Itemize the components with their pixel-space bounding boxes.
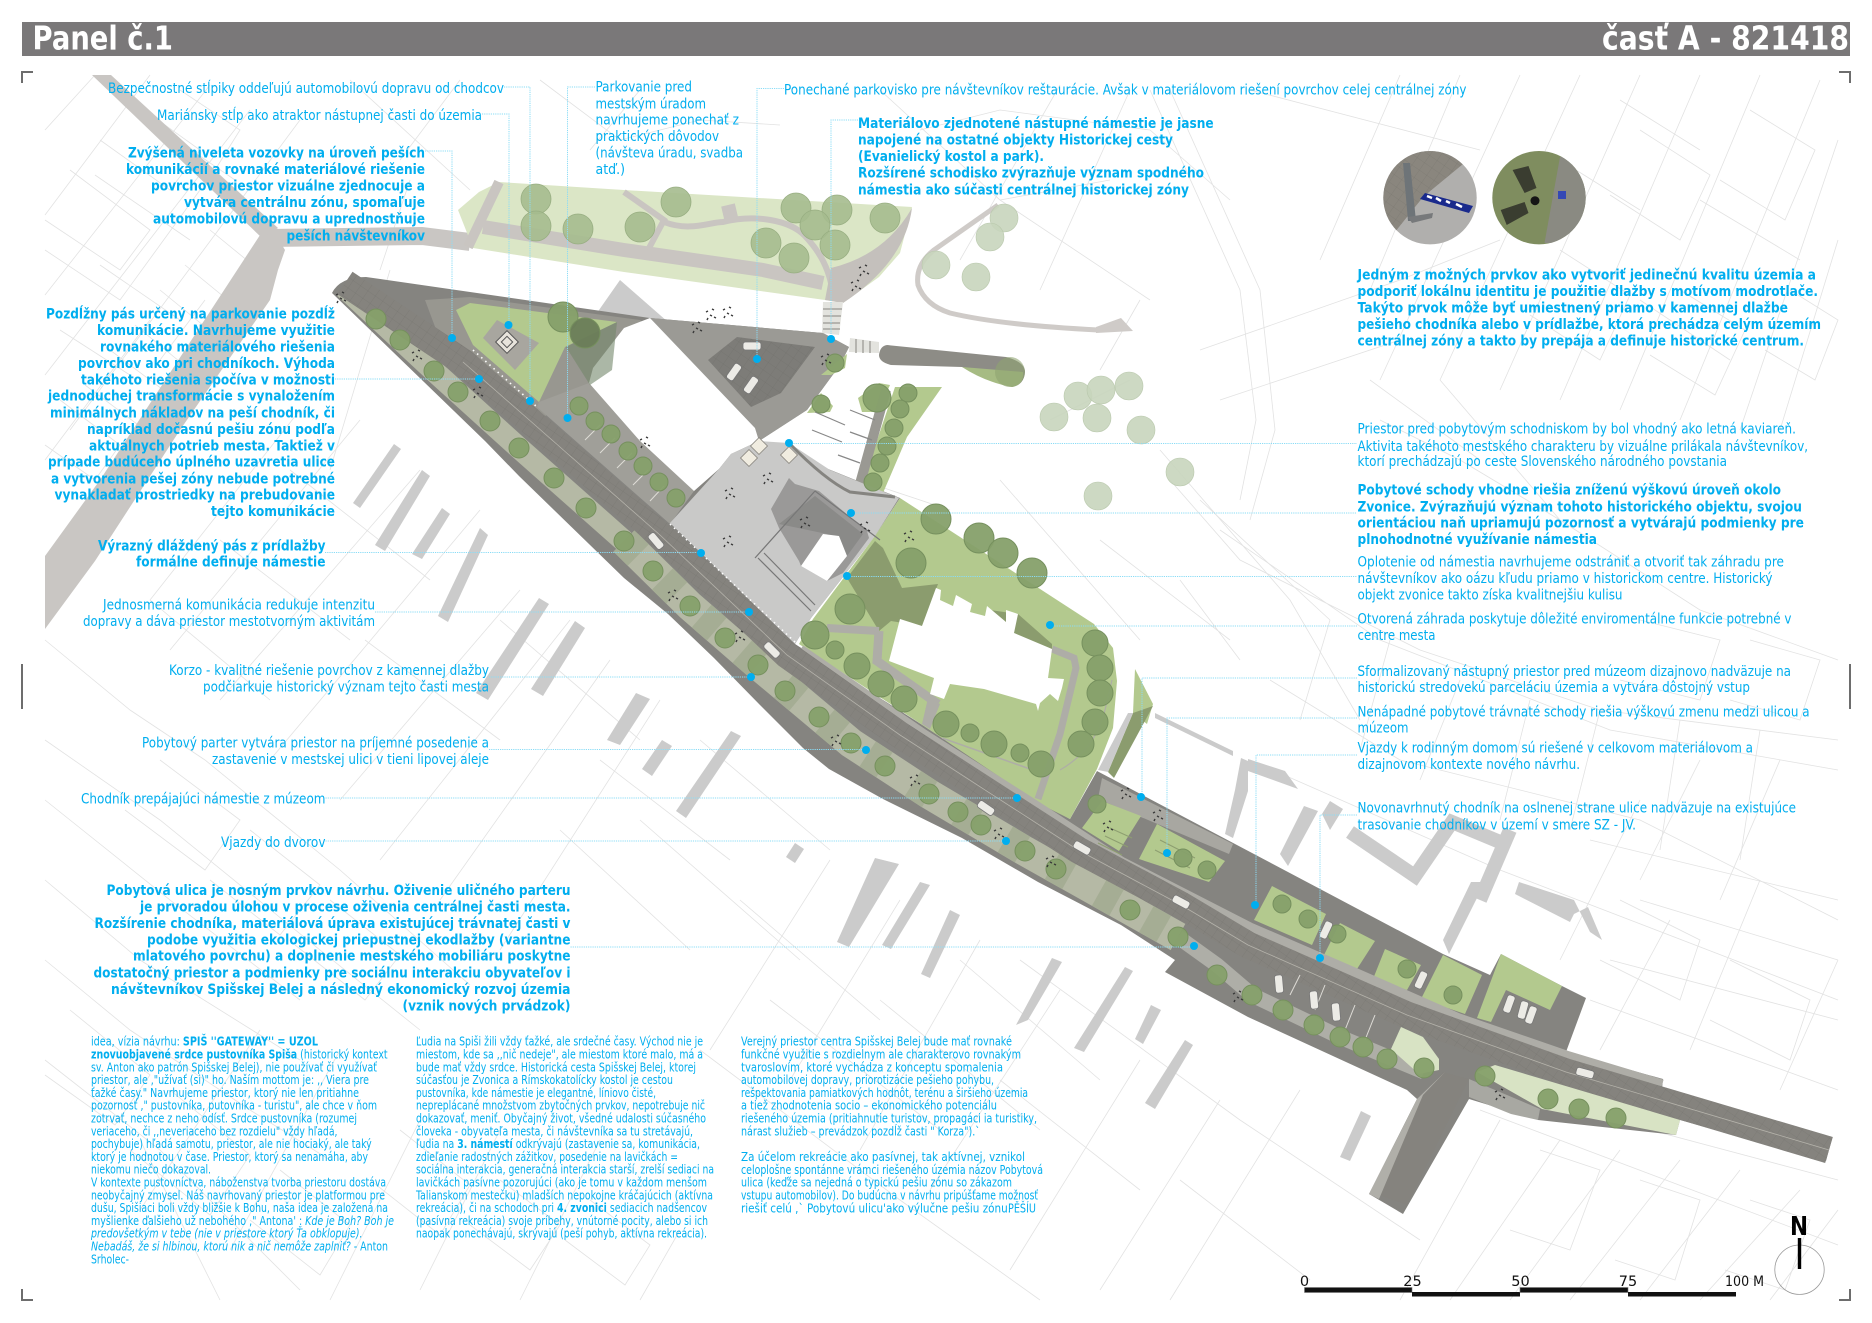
note: one-way road: Jednosmerná komunikácia redukuje intenzitu [102, 597, 375, 613]
tree strip [345, 288, 1424, 1072]
body text column 2: people of Spiš: Talianskom mestečku) mladších nepokojne kráčajúcich (aktívna [415, 1188, 713, 1202]
note: terrace parter: zastavenie v mestskej ulici v tieni lipovej aleje [212, 752, 489, 768]
note: fence removal: objekt zvonice takto získa kvalitnejšiu kulisu [1358, 588, 1622, 604]
note: fence removal [1358, 555, 1784, 604]
body text column 3: public space: nárast služieb – prevádzok pozdĺž časti " Korza").` [741, 1123, 980, 1138]
note: unified square: napojené na ostatné objekty Historickej cesty [858, 133, 1173, 149]
body text column 1: vision: V kontexte pustovníctva, náboženstva tvorba priestoru dostáva [91, 1176, 386, 1190]
white building wedge [589, 318, 759, 491]
note: museum forecourt: Sformalizovaný nástupný priestor pred múzeom dizajnovo nadväzuje na [1358, 664, 1791, 680]
note: open garden [1358, 611, 1792, 644]
note: residential street [94, 883, 571, 1014]
note: town hall parking: praktických dôvodov [596, 129, 719, 145]
parking green wedge [860, 387, 942, 493]
note: terrace steps [1358, 483, 1804, 548]
note: town hall parking: atď.) [596, 162, 625, 178]
note: bollards: Bezpečnostné stĺpiky oddeľujú automobilovú dopravu od chodcov [108, 79, 504, 97]
body text column 1: vision: znovuobjavené srdce pustovníka Spiša (historický kontext [91, 1048, 388, 1062]
note: parking strip: jednoduchej transformácie s vynaložením [47, 389, 335, 405]
triangular parking surround [650, 318, 849, 441]
note: residential street: návštevníkov Spišskej Belej a následný ekonomický rozvoj územia [111, 982, 570, 998]
body text column 1: vision: Srholec- [91, 1252, 129, 1266]
museum building [889, 588, 1064, 711]
body text column 1: vision [90, 1034, 394, 1266]
note: residential street: Rozšírenie chodníka, materiálová úprava existujúcej trávnatej časti v [94, 916, 571, 932]
body text column 3: public space: vstupu automobilov). Do budúcna v návrhu pripúšťame možnosť [741, 1189, 1038, 1203]
note: parking strip: komunikácie. Navrhujeme využitie [97, 323, 335, 339]
note: open garden: centre mesta [1358, 628, 1436, 644]
body text column 2: people of Spiš: (pasívna rekreácia) svoje príbehy, vnútorné pocity, alebo si ich [416, 1214, 708, 1228]
note: parking strip: tejto komunikácie [211, 504, 335, 520]
note: indigo-print paving: Takýto prvok môže byť umiestnený priamo v kamennej dlažbe [1358, 300, 1788, 316]
note: open garden: Otvorená záhrada poskytuje dôležité enviromentálne funkcie potrebné v [1358, 611, 1792, 627]
body text column 1: vision: veriaceho, či ,,neveriaceho bez rozdielu" vždy hľadá, [91, 1124, 338, 1138]
note: museum forecourt [1358, 664, 1791, 696]
grey building shadows [353, 280, 1602, 1161]
note: parking strip: a vytvorenia pešej zóny nebude potrebné [51, 471, 335, 487]
small lawns beside parking [807, 354, 890, 413]
note: parking strip: napríklad dočasnú pešiu zónu podľa [87, 422, 335, 438]
note: unified square: námestia ako súčasti centrálnej historickej zóny [858, 182, 1189, 198]
note: paved belt: formálne definuje námestie [136, 555, 326, 571]
note: fence removal: Oplotenie od námestia navrhujeme odstrániť a otvoriť tak záhradu pre [1358, 555, 1784, 571]
body text column 1: vision: pozornosť ," pustovníka, putovníka - turistu", ale chce v ňom [91, 1099, 377, 1113]
note: paved belt: Výrazný dláždený pás z prídlažby [98, 538, 326, 554]
note: Korzo: podčiarkuje historický význam tejto časti mesta [203, 680, 489, 696]
garden trees [548, 302, 1113, 777]
note: residential street: (vznik nových prvádzok) [402, 998, 570, 1014]
note: raised roadway: automobilovú dopravu a uprednostňuje [153, 212, 425, 228]
note: town hall parking: mestským úradom [596, 96, 706, 112]
note: terrace parter: Pobytový parter vytvára priestor na príjemné posedenie a [142, 735, 489, 751]
note: unified square [858, 116, 1214, 198]
note: driveways: Vjazdy k rodinným domom sú riešené v celkovom materiálovom a [1358, 741, 1753, 757]
note: paved belt [98, 538, 326, 571]
existing road network in light grey [45, 75, 470, 629]
body text column 2: people of Spiš: sociálna interakcia, generačná interakcia starší, zrelší sediaci na [416, 1163, 714, 1177]
note: summer cafe: Priestor pred pobytovým schodniskom by bol vhodný ako letná kaviareň. [1358, 421, 1796, 437]
upper park lawn [458, 182, 912, 303]
main street pavement [332, 277, 1832, 1214]
steps [755, 491, 880, 611]
people [336, 265, 1505, 1100]
body text column 3: public space: automobilovej dopravy, priorotizácie pešieho pohybu, [741, 1073, 994, 1087]
body text column 3: public space: tvaroslovím, ktoré vychádza z konceptu spomalenia [741, 1060, 1003, 1074]
faded existing trees [922, 204, 1194, 510]
body text column 2: people of Spiš: ľudia na 3. námestí odkrývajú (zastavenie sa, komunikácia, [416, 1137, 700, 1151]
note: residential street: Pobytová ulica je nosným prvkov návrhu. Oživenie uličného parteru [106, 883, 570, 899]
scale labels: 0 [1300, 1274, 1309, 1290]
body text column 3: public space: ulica (keďže sa nejedná o typickú pešiu zónu so zákazom [741, 1176, 1012, 1190]
body text column 2: people of Spiš: naopak ponechávajú, skrývajú (peší pohyb, aktívna rekreácia). [416, 1227, 707, 1241]
body text column 1: vision: dušu, Spišiaci boli vždy bližšie k Bohu, naša idea je založená na [91, 1201, 388, 1215]
note: new sidewalk [1358, 801, 1796, 833]
scale labels: 25 [1403, 1274, 1422, 1290]
garden lawn [799, 498, 1117, 819]
body text column 1: vision: idea, vízia návrhu: SPIŠ ''GATEWAY'' = UZOL [91, 1034, 318, 1049]
note: parking strip: aktuálnych potrieb mesta. Taktiež v [89, 438, 335, 454]
kiosks [741, 438, 797, 466]
parking lines [585, 425, 1375, 1040]
note: one-way road: dopravy a dáva priestor mestotvorným aktivitám [83, 614, 375, 630]
body text column 2: people of Spiš: bude mať vždy srdce. Historická cesta Spišskej Belej, ktorej [416, 1060, 696, 1074]
leader lines [325, 87, 1357, 958]
body text column 3: public space: riešeného územia (pritiahnutie turistov, propagáci ia turistiky, [741, 1112, 1037, 1126]
note: town hall parking: Parkovanie pred [596, 80, 692, 96]
body text column 2: people of Spiš: lavičkách pasívne pozorujúci (ako je tomu v každom menšom [416, 1176, 707, 1190]
note: driveways [1358, 741, 1753, 773]
body text column 2: people of Spiš: Ľudia na Spiši žili vždy ťažké, ale srdečné časy. Východ nie je [416, 1035, 703, 1049]
upper park trees [521, 184, 900, 273]
body text column 1: vision: niekomu niečo dokazoval. [91, 1163, 211, 1177]
body text column 3: public space: rešpektovania pamiatkových hodnôt, terénu a širšieho územia [741, 1086, 1028, 1100]
note: unified square: Materiálovo zjednotené nástupné námestie je jasne [858, 116, 1214, 132]
note: fence removal: návštevníkov ako oázu kľudu priamo v historickom centre. Historický [1358, 571, 1773, 587]
street trees [366, 309, 1626, 1128]
note: Marian column: Mariánsky stĺp ako atraktor nástupnej časti do územia [157, 106, 482, 124]
note: yard entrances: Vjazdy do dvorov [221, 835, 326, 851]
note: unified square: (Evanielický kostol a park). [858, 149, 1044, 165]
note: museum forecourt: historickú stredovekú parceláciu územia a vytvára dôstojný vstup [1358, 680, 1750, 696]
body text column 2: people of Spiš: zdieľanie radostných zážitkov, posedenie na lavičkách = [416, 1150, 678, 1164]
body text column 3: public space: Za účelom rekreácie ako pasívnej, tak aktívnej, vznikol [741, 1150, 1025, 1164]
note: residential street: dostatočný priestor a podmienky pre sociálnu interakciu obyvateľov i [94, 965, 570, 981]
note: grass steps: múzeom [1358, 721, 1408, 737]
Marian column square [483, 320, 539, 370]
pedestrian crossings [822, 302, 879, 353]
detail photo: bench on lawn with motif [1492, 151, 1586, 244]
scale labels: 100 M [1725, 1274, 1764, 1290]
body text column 1: vision: predovšetkým v tebe (nie v priestore ktorý Ťa obklopuje). [90, 1226, 362, 1241]
note: raised roadway: komunikácií a rovnaké materiálové riešenie [126, 162, 425, 178]
note: new sidewalk: trasovanie chodníkov v území v smere SZ - JV. [1358, 817, 1636, 833]
triangular parking [708, 337, 815, 407]
note: terrace steps: Zvonice. Zvýrazňujú význam tohoto historického objektu, svojou [1358, 499, 1802, 515]
note: terrace parter [142, 735, 489, 768]
note: walkway: Chodník prepájajúci námestie z múzeom [81, 792, 326, 808]
note: parking strip: minimálnych nákladov na peší chodník, či [50, 405, 335, 421]
north arrow: N [1790, 1212, 1808, 1242]
small parking stalls [812, 410, 875, 463]
body text column 1: vision: neobyčajný zmysel. Náš navrhovaný priestor je platformou pre [91, 1188, 385, 1202]
road [345, 283, 1829, 1150]
side street [1379, 1072, 1469, 1205]
header bar [22, 18, 1850, 58]
scale segments [1304, 1288, 1736, 1296]
scale labels: 75 [1619, 1274, 1637, 1290]
note: terrace steps: plnohodnotné využívanie námestia [1358, 532, 1597, 548]
lawn shadow [566, 322, 617, 385]
note: raised roadway: povrchov priestor vizuálne zjednocuje a [151, 179, 425, 195]
body text column 2: people of Spiš [415, 1035, 714, 1241]
stair arc to plaza [789, 443, 895, 497]
museum row steps [1098, 828, 1195, 868]
body text column 1: vision: zotrvať, nechce z neho odísť. Srdce pustovníka (rozumej [91, 1112, 357, 1126]
note: raised roadway: vytvára centrálnu zónu, spomaľuje [184, 195, 425, 211]
body text column 3: public space: PĚŠÍU [1008, 1200, 1036, 1215]
body text column 1: vision: pochybuje) hľadá samotu, priestor, ale nie hociaký, ale taký [91, 1137, 372, 1151]
body text column 3: public space: a tiež zhodnotenia socio – ekonomického potenciálu [741, 1099, 997, 1113]
note: raised roadway: peších návštevníkov [286, 228, 425, 244]
note: parking strip: povrchov ako pri chodníkoch. Výhoda [78, 356, 335, 372]
note: parking strip: rovnakého materiálového riešenia [100, 339, 335, 355]
note: restaurant parking: Ponechané parkovisko pre návštevníkov reštaurácie. Avšak v materiálovom riešení povrchov celej centrálnej zóny [784, 82, 1467, 98]
note: town hall parking [596, 80, 743, 178]
body text column 3: public space: celoplošne spontánne vrámci riešeného územia názov Pobytová [741, 1163, 1043, 1177]
body text column 3: public space: Verejný priestor centra Spišskej Belej bude mať rovnaké [741, 1035, 1012, 1049]
note: parking strip: Pozdĺžny pás určený na parkovanie pozdĺž [46, 304, 335, 322]
scale labels: 50 [1511, 1274, 1530, 1290]
note: terrace steps: Pobytové schody vhodne riešia zníženú výškovú úroveň okolo [1358, 483, 1781, 499]
note: residential street: je prvoradou úlohou v procese oživenia centrálnej časti mesta. [139, 899, 570, 915]
lighter pavement around the lawn [425, 297, 650, 420]
note: terrace steps: orientáciou naň upriamujú pozornosť a vytvárajú podmienky pre [1358, 516, 1804, 532]
note: unified square: Rozšírené schodisko zvýrazňuje význam spodného [858, 166, 1204, 182]
body text column 2: people of Spiš: miestom, kde sa ,,nič nedeje", ale miestom ktoré malo, má a [416, 1048, 703, 1062]
note: Korzo: Korzo - kvalitné riešenie povrchov z kamennej dlažby [169, 663, 489, 679]
note: raised roadway: Zvýšená niveleta vozovky na úroveň peších [128, 146, 425, 162]
body text column 1: vision: ktorý je hodnotou v čase. Priestor, ktorý sa nenamáha, aby [91, 1150, 368, 1164]
road stub with lawn [879, 345, 1025, 387]
lawn sidewalk row [1098, 778, 1233, 854]
note: parking strip: prípade budúceho úplného uzavretia ulice [48, 455, 335, 471]
garden paths [827, 628, 1112, 799]
leader markers [448, 321, 1324, 962]
note: one-way road [83, 597, 375, 630]
body text column 2: people of Spiš: nepreplácané množstvom zbytočných prvkov, nepotrebuje nič [416, 1099, 705, 1113]
note: Korzo [169, 663, 489, 696]
panel title: Panel č.1 [32, 18, 173, 58]
body text column 3: public space: riešiť celú ,` Pobytovú ulicu'ako výlučne pešiu zónu. [741, 1201, 1011, 1215]
sidewalk along road [800, 650, 1662, 1085]
triangular lawn [456, 303, 617, 402]
body text column 3: public space: funkčné využitie s rozdielnym ale charakterovo rovnakým [741, 1048, 1021, 1062]
body text column 2: people of Spiš: človeka - obyvateľa mesta, či návštevníka sa tu stretávajú, [416, 1124, 693, 1138]
garden shadow [847, 541, 938, 631]
plaza [670, 441, 899, 644]
note: driveways: dizajnovom kontexte nového návrhu. [1358, 757, 1580, 773]
park paths [468, 182, 912, 303]
body text column 3: public space [741, 1035, 1043, 1215]
body text column 2: people of Spiš: dokazovať, meniť. Obyčajný život, všedné udalosti súčasného [416, 1112, 706, 1126]
body text column 1: vision: ťažké časy." Navrhujeme priestor, ktorý nie len pritiahne [91, 1086, 359, 1100]
note: parking strip: takéhoto riešenia spočíva v možnosti [81, 372, 335, 388]
note: town hall parking: navrhujeme ponechať z [596, 112, 739, 128]
note: summer cafe: ktorí prechádzajú po ceste Slovenského národného povstania [1358, 454, 1727, 470]
scale bar [1300, 1274, 1764, 1296]
north arrow [1775, 1212, 1824, 1294]
belfry [801, 534, 847, 581]
note: grass steps [1358, 704, 1810, 737]
body text column 1: vision: Nebadáš, že si hlbinou, ktorú nik a nič nemôže zaplniť? - Anton [91, 1240, 388, 1254]
museum forecourt lawns [1082, 801, 1562, 1022]
body text column 1: vision: myšlienke ďalšieho už nebohého ," Antona' : Kde je Boh? Boh je [91, 1214, 394, 1228]
body text column 2: people of Spiš: súčasťou je Zvonica a Rímskokatolícky kostol je cestou [416, 1073, 673, 1087]
NE parking strip [537, 383, 694, 524]
scale labels [1300, 1274, 1764, 1290]
note: parking strip [46, 304, 335, 520]
note: residential street: mlatového povrchu) a doplnenie mestského mobiliáru poskytne [133, 949, 571, 965]
body text column 1: vision: priestor, ale ,"užívať (si)" ho. Naším mottom je: ,, Viera pre [91, 1073, 369, 1087]
note: town hall parking: (návšteva úradu, svadba [596, 146, 743, 162]
south-east street lawns [1391, 1027, 1680, 1135]
note: raised roadway [126, 146, 425, 244]
cars [647, 342, 1595, 1079]
body text column 2: people of Spiš: rekreácia), či na schodoch pri 4. zvonici sediacich nadšencov [416, 1201, 707, 1215]
paved strip by steps [858, 390, 886, 491]
sunken area by the belfry [771, 478, 869, 581]
note: summer cafe [1358, 421, 1808, 470]
note: indigo-print paving [1357, 267, 1821, 349]
note: residential street: podobe využitia ekologickej priepustnej ekodlažby (variantne [147, 932, 571, 948]
detail photo: paving with indigo-print motif [1383, 151, 1477, 244]
curved lane on the hill [918, 205, 1133, 333]
body text column 2: people of Spiš: pustovníka, kde námestie je elegantné, líniovo čisté, [416, 1086, 656, 1100]
steps by the museum [1098, 669, 1153, 778]
note: parking strip: vynakladať prostriedky na prebudovanie [54, 488, 335, 504]
body text column 1: vision: sv. Anton ako patrón Spišskej Belej), nie používať či využívať [91, 1060, 377, 1074]
